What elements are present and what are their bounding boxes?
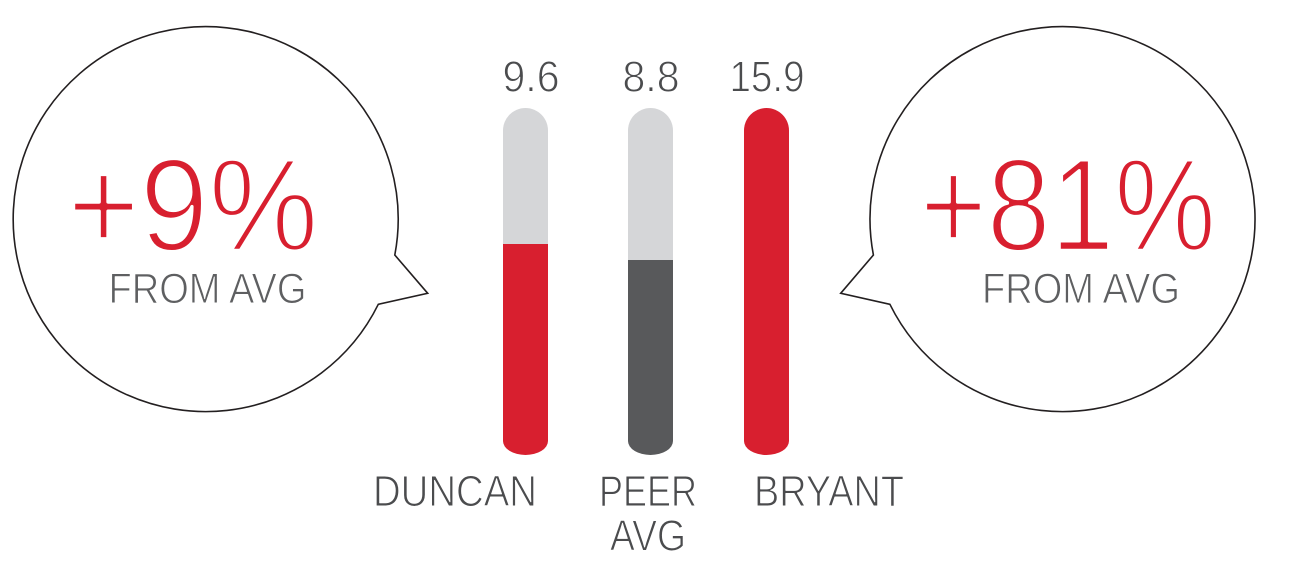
bar: Peer average bbox=[599, 52, 697, 560]
bar: Bryant bbox=[730, 52, 904, 516]
callout: Bryant: FROM AVG bbox=[982, 265, 1180, 313]
bar: Duncan bbox=[373, 52, 560, 516]
bar: Duncan: 9.6 bbox=[502, 52, 560, 102]
callout: Bryant bbox=[841, 27, 1255, 412]
callout: Duncan bbox=[13, 27, 428, 412]
bar: Bryant: 15.9 bbox=[730, 52, 804, 102]
bar: Peer average: PEER bbox=[599, 467, 697, 516]
bar: Bryant: BRYANT bbox=[754, 467, 904, 516]
bar: Peer average: AVG bbox=[610, 512, 686, 560]
callout: Duncan: FROM AVG bbox=[108, 265, 306, 313]
bar: Duncan: DUNCAN bbox=[373, 467, 537, 516]
callout: Duncan: +9% bbox=[68, 132, 318, 278]
bar: Peer average: 8.8 bbox=[622, 52, 680, 102]
callout: Bryant: +81% bbox=[920, 132, 1216, 278]
